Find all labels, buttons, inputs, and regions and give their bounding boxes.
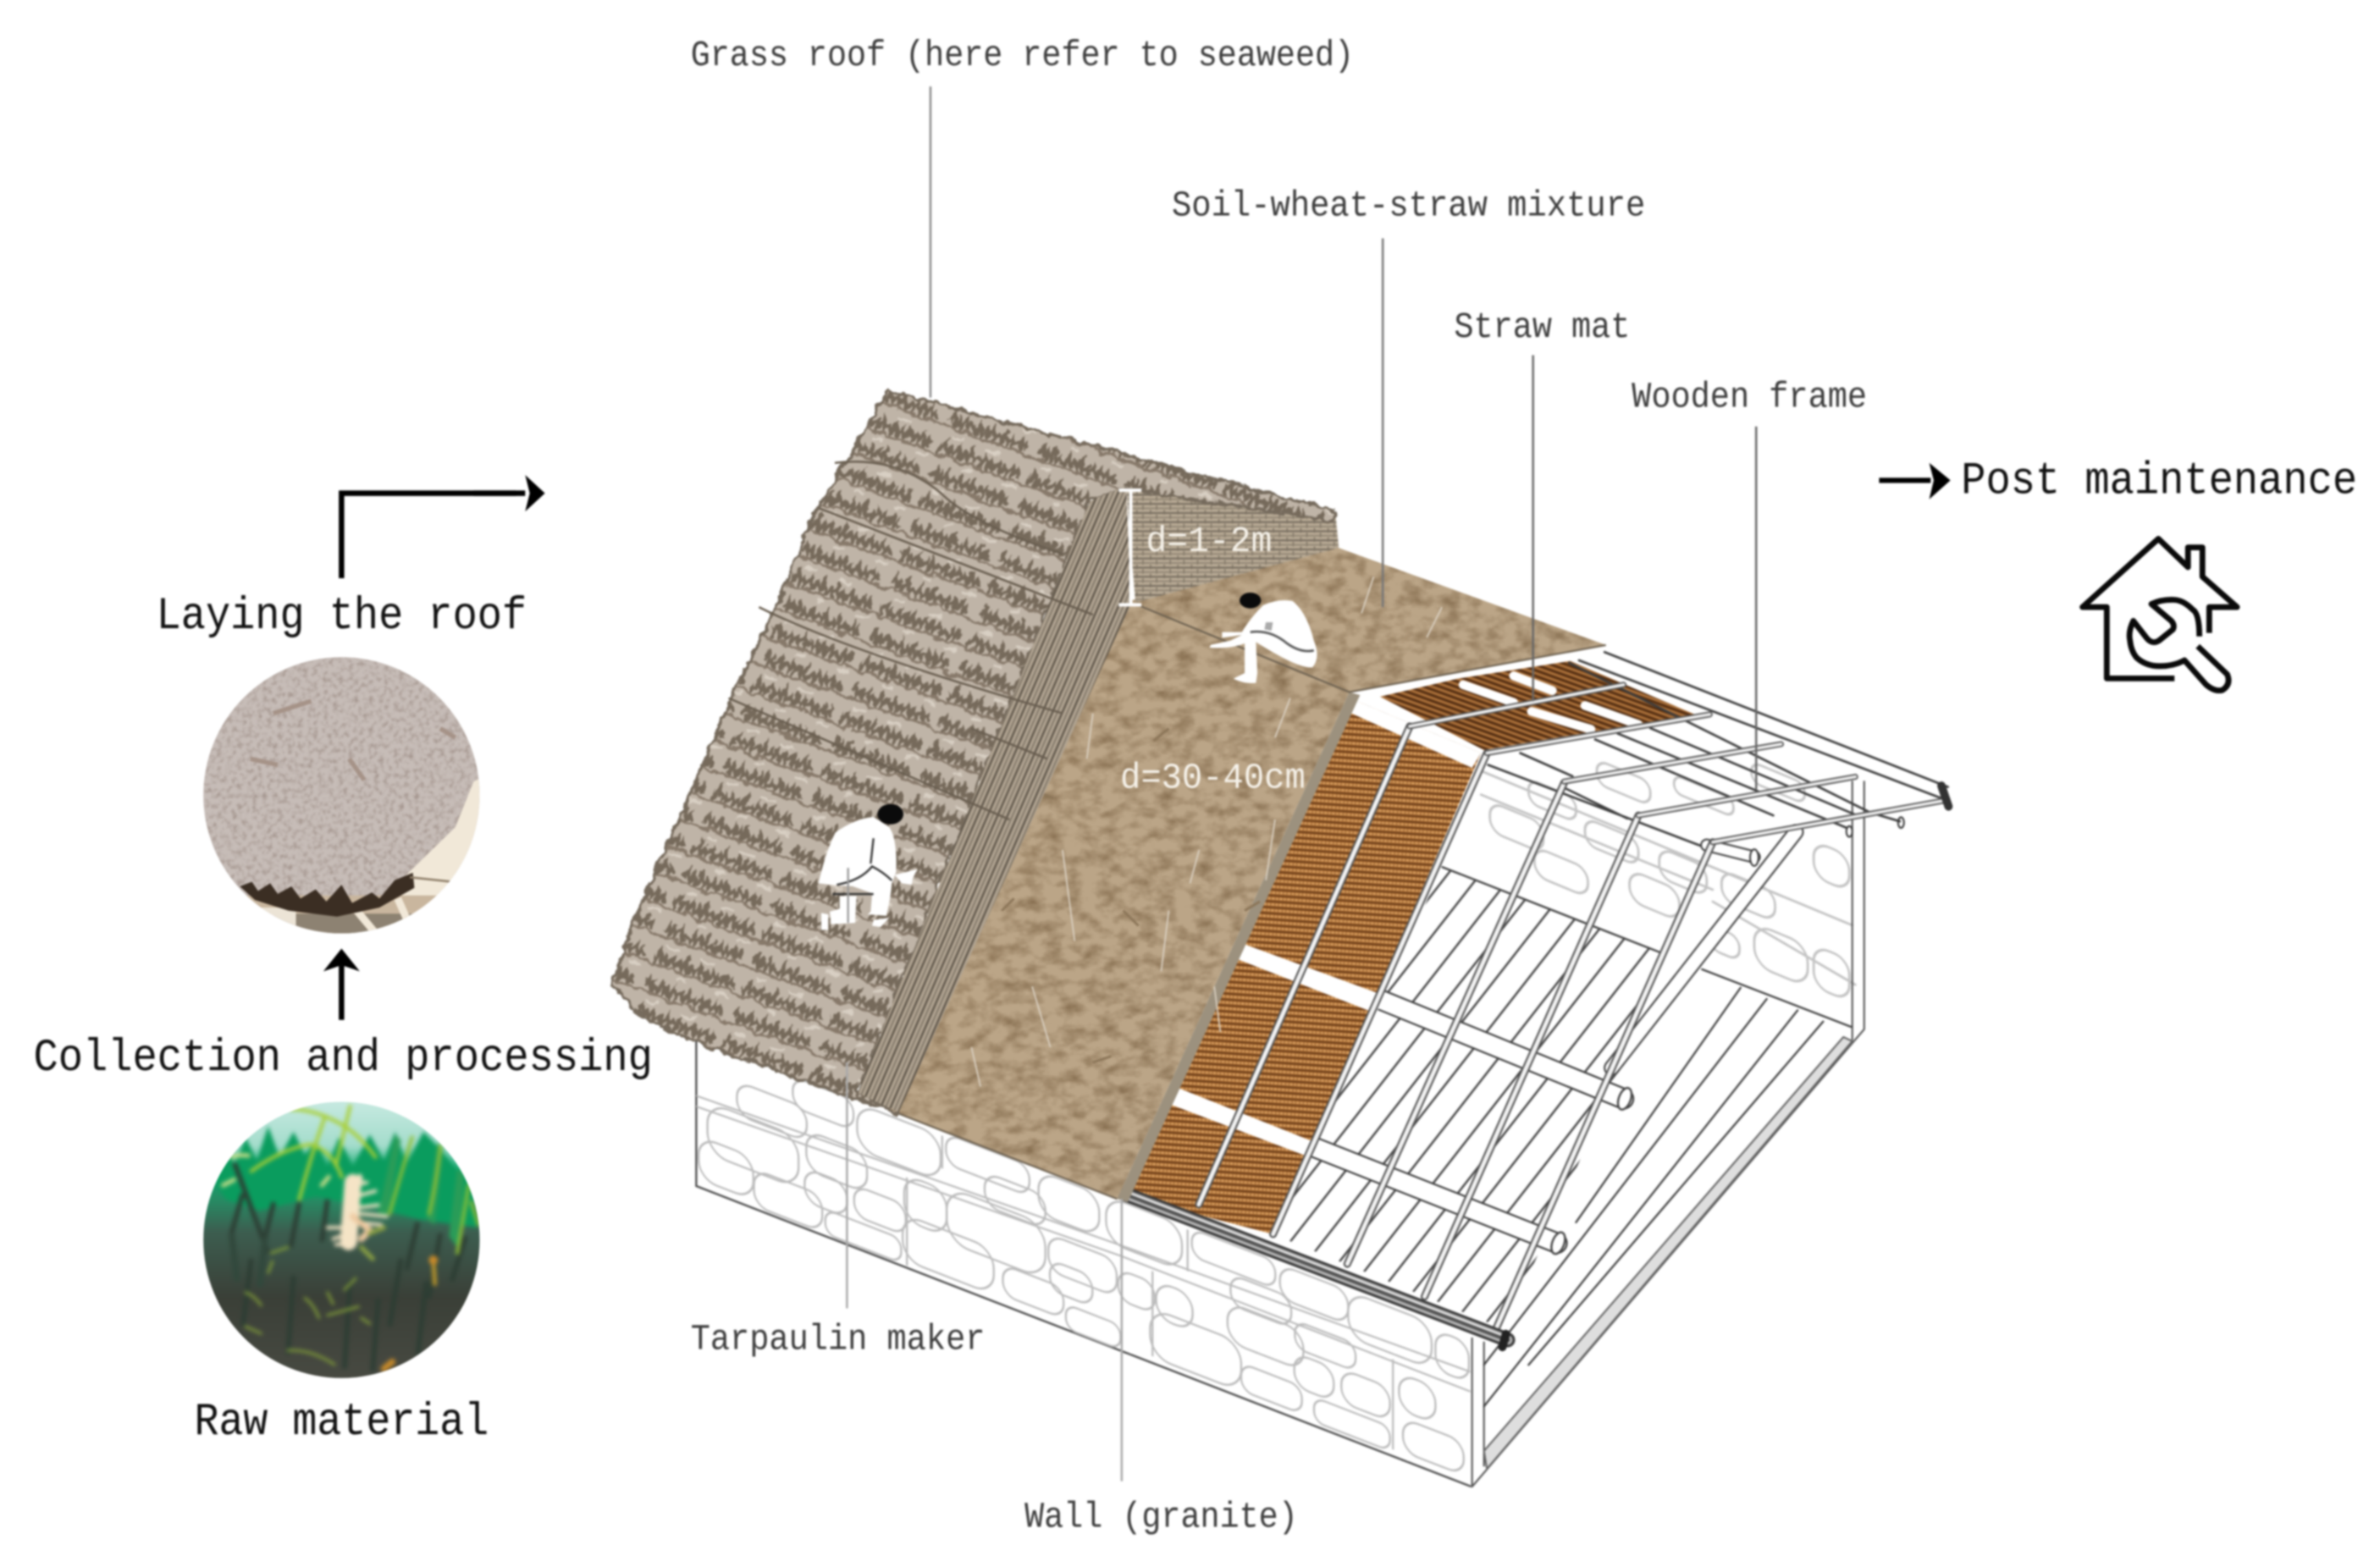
cream wedge — [401, 779, 481, 897]
leader: grass roof — [930, 86, 931, 398]
roof battens — [1488, 652, 1948, 866]
grass roof (seaweed thatch) — [611, 390, 1339, 1114]
timber frame, boards, back wall and straw mat — [1124, 652, 1948, 1487]
diagonal brace — [1612, 832, 1796, 1068]
back wall stones — [1481, 653, 1855, 1007]
eave below thatch — [248, 894, 437, 914]
thatch main slope — [611, 390, 1336, 1114]
label: tarpaulin maker: Tarpaulin maker — [691, 1319, 985, 1360]
green blade mass — [214, 1126, 477, 1228]
leader: wall — [1121, 1199, 1123, 1481]
dark blades — [231, 1162, 466, 1371]
label: soil-wheat-straw mixture: Soil-wheat-straw mixture — [1172, 185, 1645, 227]
label: collection and processing: Collection and processing — [33, 1033, 653, 1084]
label: laying the roof: Laying the roof — [157, 591, 527, 643]
rafters — [1199, 685, 1948, 1329]
dark fringe — [240, 873, 414, 917]
purlins with end caps — [1309, 1000, 1634, 1255]
thatch cut edge — [858, 486, 1131, 1112]
floor boards — [1484, 969, 1853, 1469]
label: raw material: Raw material — [194, 1397, 489, 1448]
leader lines — [847, 86, 1756, 1481]
straw mat back section — [1380, 661, 1695, 750]
leader: wooden frame — [1755, 427, 1757, 789]
worker sitting on the soil layer — [1209, 593, 1317, 683]
label: straw mat: Straw mat — [1454, 306, 1630, 348]
upper purlin — [1443, 867, 1659, 952]
arrow: to post maintenance — [1879, 463, 1951, 499]
dimension: thatch thickness: d=1-2m — [1146, 521, 1272, 562]
eave beam — [1124, 1191, 1508, 1347]
straw mat front — [1124, 699, 1481, 1234]
dimension: soil thickness: d=30-40cm — [1120, 757, 1306, 798]
right end wall outline — [1472, 781, 1864, 1487]
arrow: from laying the roof to the house — [341, 475, 545, 578]
leader: soil mixture — [1382, 238, 1383, 607]
house cutaway illustration — [611, 390, 1948, 1487]
icon: house with wrench — [2083, 538, 2237, 691]
dimension bracket d=1-2m — [1118, 490, 1141, 604]
granite front wall — [696, 1035, 1472, 1487]
yellow-green blades — [223, 1106, 478, 1369]
leader: straw mat — [1532, 356, 1534, 701]
inner hatched boards — [1273, 867, 1659, 1329]
label: wooden frame: Wooden frame — [1632, 376, 1867, 417]
photo: underwater seagrass — [201, 1098, 485, 1383]
seagrass flower — [328, 1175, 387, 1259]
arrow: collection to laying — [323, 948, 360, 1020]
soil-wheat-straw layer — [873, 548, 1606, 1202]
thatch end face — [1126, 486, 1339, 603]
photo: laid thatched roof — [202, 655, 489, 941]
label: grass roof: Grass roof (here refer to seaweed) — [691, 35, 1354, 76]
leader: tarpaulin maker — [846, 1062, 848, 1308]
label: wall (granite): Wall (granite) — [1024, 1496, 1298, 1537]
worker laying the thatch — [819, 804, 917, 930]
